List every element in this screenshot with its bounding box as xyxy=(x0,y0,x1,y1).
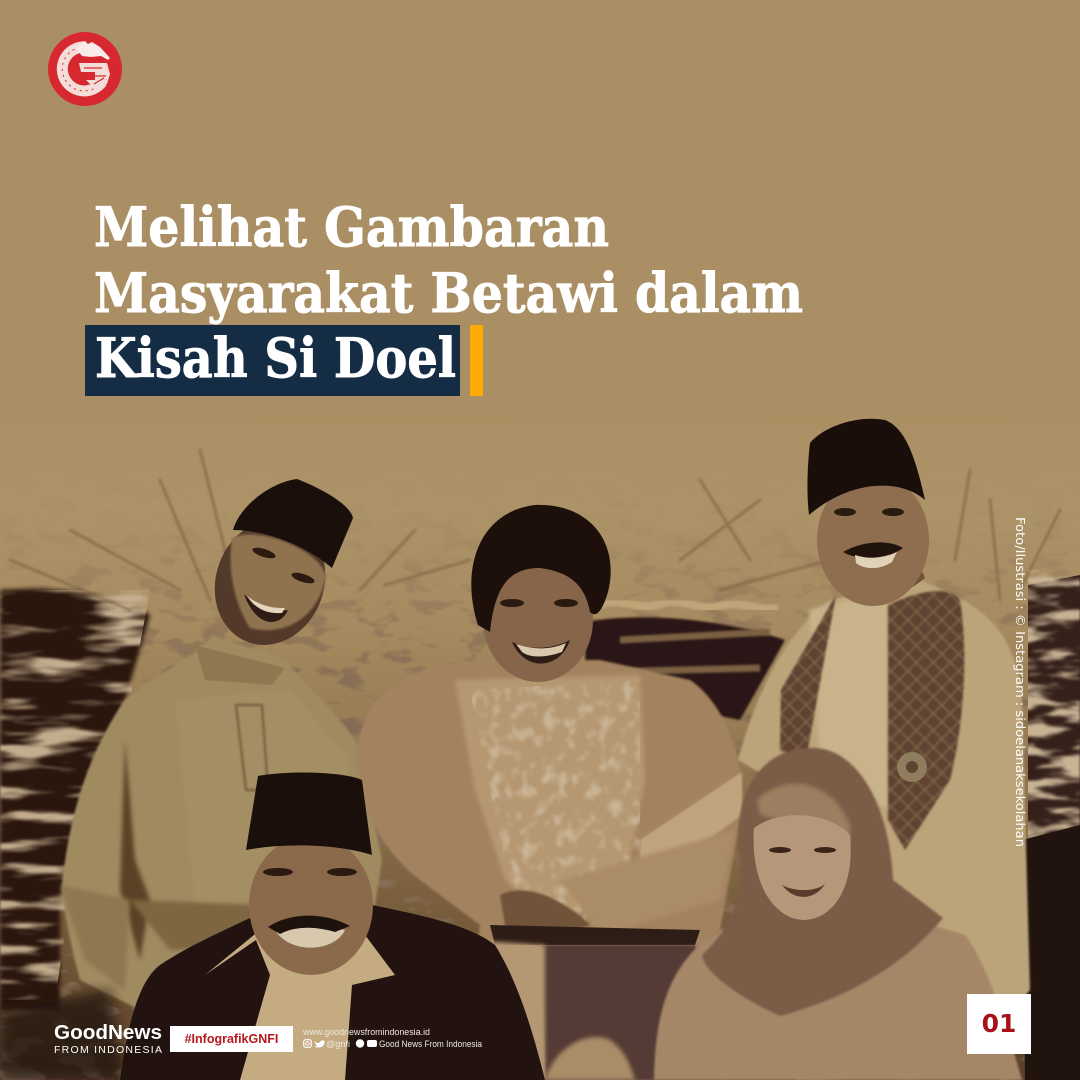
footer: website and social handles xyxy=(302,1027,482,1049)
page number badge: 01 xyxy=(982,1009,1016,1038)
title text: Kisah Si Doel xyxy=(95,326,456,390)
page number badge xyxy=(967,994,1031,1054)
logo: GNFI red circle emblem xyxy=(48,32,122,106)
foliage background xyxy=(0,440,1080,1080)
title block xyxy=(85,195,803,396)
person: woman front right xyxy=(654,748,1022,1080)
footer: hashtag box xyxy=(170,1026,293,1052)
family photo illustration xyxy=(0,418,1080,1080)
title text xyxy=(94,195,803,390)
footer: website and social handles: Good News From Indonesia xyxy=(379,1039,482,1049)
person: woman back left xyxy=(60,479,382,1010)
title text: Melihat Gambaran xyxy=(94,195,609,259)
footer: website and social handles: www.goodnewsfromindonesia.id xyxy=(302,1027,430,1037)
title accent bar xyxy=(470,325,483,396)
footer: website and social handles: @gnfi xyxy=(326,1039,350,1049)
footer: hashtag box: #InfografikGNFI xyxy=(185,1032,278,1046)
title highlight box xyxy=(85,325,460,396)
person: woman centre xyxy=(358,505,742,1080)
footer: GoodNews From Indonesia wordmark: FROM INDONESIA xyxy=(54,1044,162,1056)
person: man front left xyxy=(120,773,545,1080)
footer: GoodNews From Indonesia wordmark: GoodNews xyxy=(54,1022,162,1044)
dark shadow bottom left corner xyxy=(0,990,125,1080)
photo credit (vertical): Foto/Ilustrasi : © Instagram : sidoelanaksekolahan xyxy=(1013,517,1027,847)
footer: GoodNews From Indonesia wordmark xyxy=(54,1022,162,1056)
person: man back right xyxy=(738,419,1030,1020)
